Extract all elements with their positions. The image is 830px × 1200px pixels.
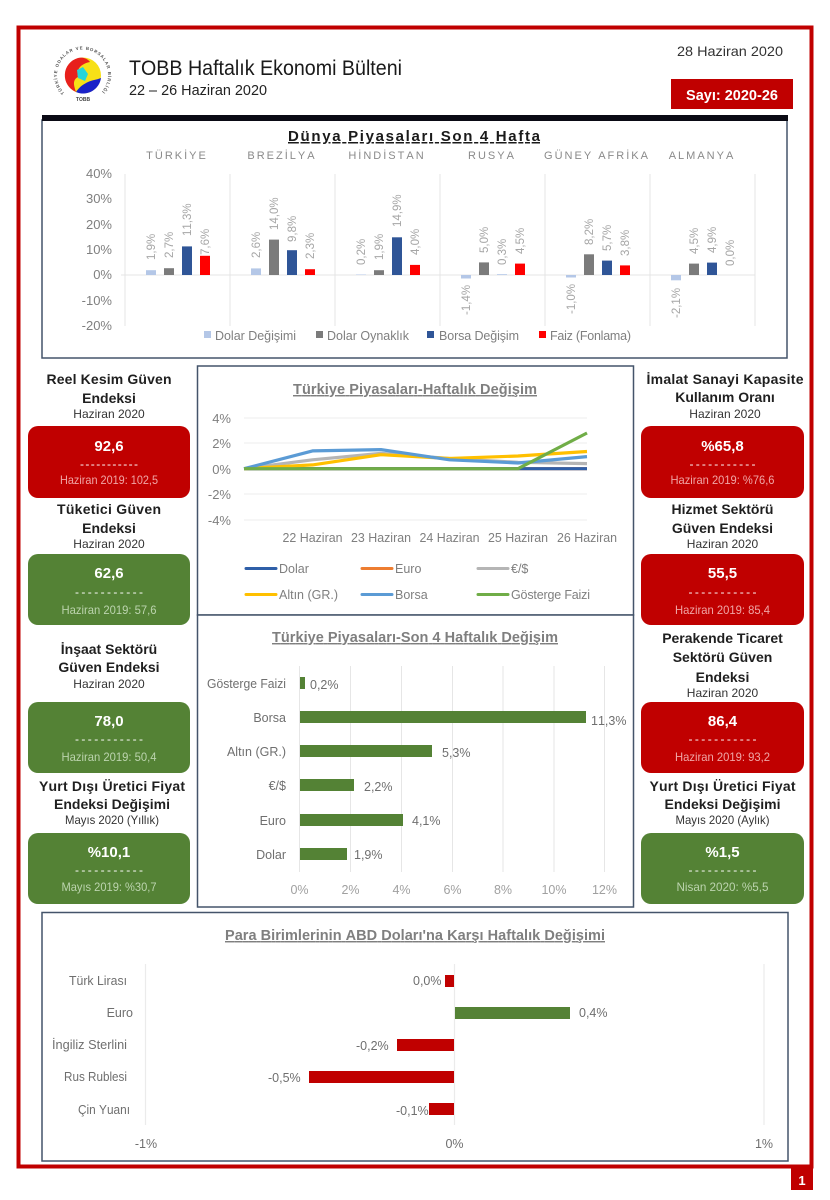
x axis: 8% [494,883,512,897]
issue badge [671,79,793,109]
card group: Kapasite: İmalat Sanayi Kapasite [646,371,804,387]
category labels: €/$ [269,779,286,793]
card group: Perakende [641,630,804,773]
rotated data labels [146,194,737,318]
card group: Perakende: 86,4 [708,713,738,730]
card group: Reel Kesim: Haziran 2020 [73,407,145,421]
card group: Kapasite [641,371,804,498]
card group: Yurt Dışı ÜFE aylık: Mayıs 2020 (Aylık) [676,813,770,827]
y axis [208,411,231,528]
bar values: 0,0% [413,974,442,988]
category labels: Borsa [253,711,286,725]
category labels: Dolar [256,848,286,862]
bars [309,975,570,1115]
card group: Tüketici: 62,6 [94,565,124,582]
y axis: 0% [212,462,231,477]
x axis labels: 24 Haziran [420,530,480,545]
category labels [207,677,286,862]
card group: Yurt Dışı ÜFE yıllık: Yurt Dışı Üretici Fiyat [39,778,185,794]
category labels: Türk Lirası [69,974,127,988]
y axis: 10% [86,242,112,257]
bar values [310,678,626,862]
card group: Hizmet: 55,5 [708,565,737,582]
card group: Reel Kesim: Reel Kesim Güven [46,371,172,387]
category labels: Euro [107,1006,133,1020]
card group: Yurt Dışı ÜFE aylık: Nisan 2020: %5,5 [676,880,769,894]
card group: Perakende: Sektörü Güven [673,649,772,665]
issue badge: Sayı: 2020-26 [686,88,778,104]
rotated data labels: 2,3% [305,233,317,259]
x axis: -1% [135,1137,157,1151]
x axis labels: 25 Haziran [488,530,548,545]
panel: world markets [42,115,788,358]
country labels: BREZİLYA [247,149,317,162]
y axis: -4% [208,513,231,528]
rotated data labels: 2,6% [251,232,263,258]
y axis: 0% [93,267,112,282]
card group: İnşaat: Güven Endeksi [58,659,160,675]
x axis labels: 23 Haziran [351,530,411,545]
card group: Perakende: Endeksi [696,669,749,685]
x axis: 1% [755,1137,773,1151]
card group: Perakende: ----------- [688,732,756,746]
rotated data labels: -1,0% [566,284,578,314]
legend: Faiz (Fonlama) [550,329,631,343]
card group: Yurt Dışı ÜFE aylık: Yurt Dışı Üretici Fiyat [650,778,796,794]
y axis: 40% [86,166,112,181]
panel: currencies against USD [42,912,788,1161]
legend [246,562,590,602]
country labels: ALMANYA [669,150,735,162]
category labels: Rus Rublesi [64,1070,127,1084]
country labels: HİNDİSTAN [348,149,426,162]
rotated data labels: 5,7% [602,225,614,251]
card group: Reel Kesim: 92,6 [94,438,124,455]
icon: TOBB logo: TOBB [76,97,90,103]
y axis: -20% [82,318,112,333]
card group: Perakende: Perakende Ticaret [662,630,783,646]
card group: Yurt Dışı ÜFE aylık: ----------- [688,863,756,877]
card group: Kapasite: Haziran 2020 [689,407,761,421]
rotated data labels: 9,8% [287,216,299,242]
card group: Kapasite: ----------- [690,457,756,471]
rotated data labels: 4,9% [707,227,719,253]
y axis: 4% [212,411,231,426]
rotated data labels: -2,1% [671,288,683,318]
category labels: Gösterge Faizi [207,677,286,691]
y axis [82,166,112,333]
category labels: Altın (GR.) [227,745,286,759]
card group: Tüketici: ----------- [75,585,143,599]
card group: İnşaat: Haziran 2020 [73,677,145,691]
category labels: İngiliz Sterlini [52,1038,127,1052]
page number: 1 [798,1173,806,1188]
x axis: 0% [445,1137,464,1151]
rotated data labels: 5,0% [479,227,491,253]
rotated data labels: 1,9% [374,234,386,260]
legend: Dolar [279,562,309,576]
card group: Tüketici [28,501,190,625]
y axis: -2% [208,487,231,502]
card group: Kapasite: Haziran 2019: %76,6 [670,473,775,487]
x axis [290,883,617,897]
rotated data labels: 4,0% [410,229,422,255]
rotated data labels: 14,9% [392,194,404,227]
card group: Hizmet: Haziran 2019: 85,4 [675,603,770,617]
publication date: 28 Haziran 2020 [677,43,783,59]
country labels: GÜNEY AFRİKA [544,149,650,162]
bar values: 5,3% [442,746,470,760]
page number [791,1168,813,1190]
card group: Hizmet: Haziran 2020 [687,537,759,551]
card group: İnşaat: ----------- [75,732,143,746]
rotated data labels: 8,2% [584,219,596,245]
card group: Tüketici: Tüketici Güven [57,501,161,517]
x axis labels: 22 Haziran [282,530,342,545]
x axis: 0% [290,883,309,897]
rotated data labels: 0,0% [725,240,737,266]
x axis labels [282,530,617,545]
card group: Tüketici: Endeksi [82,520,136,536]
rotated data labels: 2,7% [164,232,176,258]
y axis: 30% [86,191,112,206]
card group: Reel Kesim [28,371,190,498]
x axis: 4% [392,883,411,897]
bar values: 11,3% [591,714,626,728]
card group: Yurt Dışı ÜFE yıllık: Endeksi Değişimi [54,796,170,812]
card group: Reel Kesim: Endeksi [82,390,136,406]
bar values: -0,5% [268,1071,301,1085]
legend: €/$ [511,562,528,576]
card group: Yurt Dışı ÜFE yıllık: Mayıs 2020 (Yıllık) [65,813,159,827]
card group: Tüketici: Haziran 2020 [73,537,145,551]
rotated data labels: 0,3% [497,239,509,265]
card group: Perakende: Haziran 2019: 93,2 [675,750,770,764]
legend: Altın (GR.) [279,588,338,602]
rotated data labels: 7,6% [200,229,212,255]
legend: Borsa Değişim [439,329,519,343]
bar values: 1,9% [354,848,382,862]
x axis: 2% [341,883,360,897]
legend: Dolar Oynaklık [327,329,410,343]
rotated data labels: 4,5% [515,228,527,254]
rotated data labels: 4,5% [689,228,701,254]
heading: Türkiye Piyasaları-Haftalık Değişim [293,382,537,398]
panel: four-week bar chart [198,615,634,907]
lines [244,433,587,469]
category labels: Euro [260,814,286,828]
bar values: 0,4% [579,1006,608,1020]
x axis: 6% [443,883,462,897]
rotated data labels: 3,8% [620,230,632,256]
bar values: 4,1% [412,814,440,828]
bar values: -0,2% [356,1039,389,1053]
card group: İnşaat: 78,0 [94,713,124,730]
heading: Dünya Piyasaları Son 4 Hafta [288,128,541,145]
bar values: 0,2% [310,678,338,692]
card group: Reel Kesim: Haziran 2019: 102,5 [60,473,158,487]
card group: Hizmet [641,501,804,625]
y axis: 2% [212,436,231,451]
panel: weekly line chart [198,366,634,615]
heading: Türkiye Piyasaları-Son 4 Haftalık Değişim [272,630,558,646]
country labels [146,149,735,162]
legend: Dolar Değişimi [215,329,296,343]
card group: Yurt Dışı ÜFE yıllık [28,778,190,904]
card group: Hizmet: ----------- [688,585,756,599]
clustered bars [146,237,717,280]
card group: Yurt Dışı ÜFE yıllık: ----------- [75,863,143,877]
heading: Para Birimlerinin ABD Doları'na Karşı Haftalık Değişimi [225,928,605,944]
bars [300,677,586,860]
header [54,43,793,109]
x axis [135,1137,773,1151]
rotated data labels: 14,0% [269,197,281,230]
x axis: 10% [541,883,567,897]
card group: İnşaat: Haziran 2019: 50,4 [62,750,157,764]
card group: Kapasite: Kullanım Oranı [675,389,775,405]
card group: Tüketici: Haziran 2019: 57,6 [62,603,157,617]
category labels: Çin Yuanı [78,1103,130,1117]
card group: Perakende: Haziran 2020 [687,686,759,700]
date range: 22 – 26 Haziran 2020 [129,83,267,99]
x axis: 12% [592,883,617,897]
card group: Yurt Dışı ÜFE yıllık: %10,1 [88,844,130,861]
card group: Hizmet: Güven Endeksi [672,520,773,536]
legend [204,329,631,343]
icon: TOBB logo: TÜRKİYE ODALAR VE BORSALAR BİRLİĞİ [54,46,112,96]
legend: Borsa [395,588,428,602]
card group: İnşaat: İnşaat Sektörü [61,641,157,657]
card group: Yurt Dışı ÜFE aylık [641,778,804,904]
rotated data labels: 1,9% [146,234,158,260]
y axis: -10% [82,293,112,308]
bar values: -0,1% [396,1104,429,1118]
card group: Reel Kesim: ----------- [80,457,138,471]
card group: Yurt Dışı ÜFE aylık: %1,5 [705,844,740,861]
country labels: RUSYA [468,150,516,162]
card group: Yurt Dışı ÜFE aylık: Endeksi Değişimi [665,796,780,812]
x axis labels: 26 Haziran [557,530,617,545]
country labels: TÜRKİYE [146,149,208,162]
legend: Gösterge Faizi [511,588,590,602]
card group: Hizmet: Hizmet Sektörü [672,501,773,517]
bar values: 2,2% [364,780,392,794]
card group: İnşaat [28,641,190,773]
card group: Yurt Dışı ÜFE yıllık: Mayıs 2019: %30,7 [62,880,157,894]
card group: Kapasite: %65,8 [701,438,744,455]
bar values [268,974,608,1118]
title: TOBB Haftalık Ekonomi Bülteni [129,57,402,80]
rotated data labels: -1,4% [461,285,473,315]
rotated data labels: 0,2% [356,239,368,265]
category labels [52,974,133,1117]
rotated data labels: 11,3% [182,203,194,236]
y axis: 20% [86,217,112,232]
legend: Euro [395,562,421,576]
